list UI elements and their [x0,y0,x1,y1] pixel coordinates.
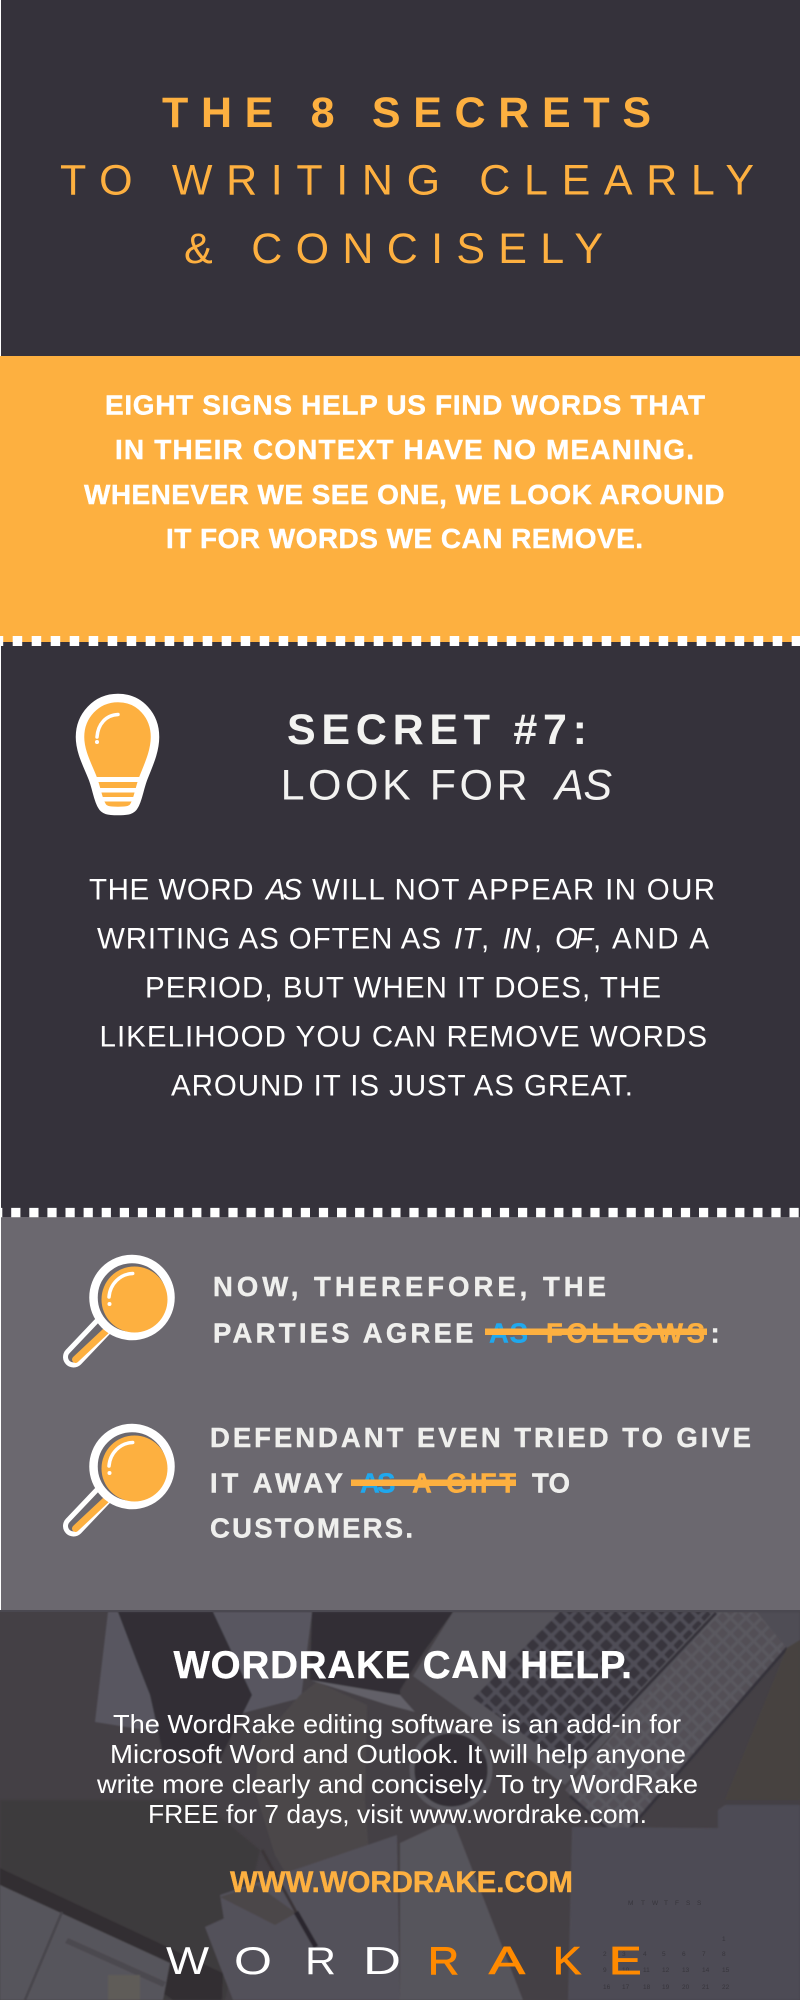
panel: secret 7 [1,642,800,1217]
logo: WordRake: R [305,1939,336,1983]
secret 7 explanation text: OF [555,922,595,956]
calendar details in photo: F [675,1900,679,1907]
footer body text: The WordRake editing software is an add-in for [113,1709,681,1739]
logo: WordRake: A [489,1938,526,1982]
secret 7 explanation text: , [534,922,542,956]
calendar details in photo: T [664,1900,668,1907]
calendar details in photo: 6 [682,1951,686,1958]
title [60,89,754,273]
panel: examples [1,1217,800,1610]
footer heading: WORDRAKE CAN HELP. [174,1644,632,1687]
example 2 text: TO [532,1468,570,1499]
logo: WordRake [166,1938,642,1983]
secret 7 explanation text: WRITING AS OFTEN AS [97,922,441,956]
footer body text: FREE for 7 days, visit www.wordrake.com. [148,1799,647,1829]
calendar details in photo: 17 [622,1984,630,1991]
intro text: EIGHT SIGNS HELP US FIND WORDS THAT [105,390,705,420]
secret 7 explanation text [89,874,715,1102]
calendar details in photo: M [628,1900,633,1907]
secret 7 explanation text: AS [264,874,302,906]
calendar details in photo: S [697,1900,702,1907]
example 2 text: AS [360,1468,396,1499]
example 1 text: PARTIES AGREE [213,1318,474,1349]
heading: secret 7: SECRET #7: [287,706,587,754]
calendar details in photo: 20 [682,1984,690,1991]
calendar details in photo: 19 [662,1984,670,1991]
example 2 text: DEFENDANT EVEN TRIED TO GIVE [210,1422,751,1453]
calendar details in photo: 5 [662,1951,666,1958]
logo: WordRake: E [609,1940,642,1983]
secret 7 explanation text: , [481,922,489,956]
calendar details in photo: 9 [603,1967,607,1974]
secret 7 explanation text: IT [454,922,482,956]
website link: WWW.WORDRAKE.COM [230,1866,573,1899]
panel: title background [1,0,800,356]
example 2 text: CUSTOMERS. [210,1513,413,1544]
logo: WordRake: W [166,1939,209,1982]
title line 3: & CONCISELY [184,225,603,273]
panel: footer photo background [0,1610,800,2000]
secret 7 explanation text: WILL NOT APPEAR IN OUR [312,874,715,906]
calendar details in photo: 16 [603,1984,611,1991]
calendar details in photo: W [652,1900,659,1907]
calendar details in photo [603,1900,730,1991]
footer body text: Microsoft Word and Outlook. It will help anyone [110,1739,686,1769]
footer body text [96,1709,698,1829]
calendar details in photo: 22 [722,1984,730,1991]
icon: magnifying glass 1 [74,1259,170,1360]
title line 2: TO WRITING CLEARLY [60,156,754,204]
example 1 text: NOW, THEREFORE, THE [213,1271,606,1302]
example 2 text [210,1422,751,1544]
calendar details in photo: 7 [702,1951,706,1958]
secret 7 explanation text: LIKELIHOOD YOU CAN REMOVE WORDS [100,1020,707,1054]
intro text [84,390,724,554]
logo: WordRake: O [234,1940,272,1983]
secret 7 explanation text: THE WORD [89,874,254,906]
title line 1: THE 8 SECRETS [162,89,651,137]
intro text: IN THEIR CONTEXT HAVE NO MEANING. [115,434,694,465]
example 1 text: FOLLOWS [546,1318,705,1349]
calendar details in photo: 14 [702,1967,710,1974]
heading: secret 7: AS [552,762,612,810]
logo: WordRake: D [363,1939,401,1982]
calendar details in photo: 11 [643,1967,650,1974]
example 2 text: IT AWAY [210,1468,343,1499]
calendar details in photo: 18 [643,1984,651,1991]
example 2 text: GIFT [446,1468,516,1499]
intro text: IT FOR WORDS WE CAN REMOVE. [166,523,643,554]
calendar details in photo: T [641,1900,645,1907]
calendar details in photo: 1 [722,1936,726,1943]
intro text: WHENEVER WE SEE ONE, WE LOOK AROUND [84,479,724,510]
example 2 text: A [412,1468,432,1499]
panel: intro banner [0,356,800,642]
calendar details in photo: 15 [722,1967,730,1974]
secret 7 explanation text: IN [502,922,532,956]
calendar details in photo: 3 [622,1951,626,1958]
calendar details in photo: 21 [702,1984,710,1991]
example 1 text [213,1271,720,1349]
calendar details in photo: 8 [722,1951,726,1958]
logo: WordRake: K [553,1938,581,1983]
footer body text: write more clearly and concisely. To try WordRake [96,1769,698,1799]
heading: secret 7: LOOK FOR [281,762,528,810]
icon: magnifying glass 2 [74,1428,170,1528]
calendar details in photo: 4 [643,1951,647,1958]
heading: secret 7 [281,706,612,810]
calendar details in photo: 10 [622,1967,630,1974]
secret 7 explanation text: AROUND IT IS JUST AS GREAT. [171,1070,633,1102]
icon: light bulb [80,698,158,812]
logo: WordRake: R [428,1939,459,1983]
example 1 text: : [710,1318,720,1349]
calendar details in photo: S [686,1900,691,1907]
secret 7 explanation text: PERIOD, BUT WHEN IT DOES, THE [145,972,661,1004]
example 1 text: AS [489,1318,528,1349]
calendar details in photo: 12 [662,1967,670,1974]
secret 7 explanation text: , AND A [593,922,709,956]
calendar details in photo: 2 [603,1951,607,1958]
calendar details in photo: 13 [682,1967,690,1974]
